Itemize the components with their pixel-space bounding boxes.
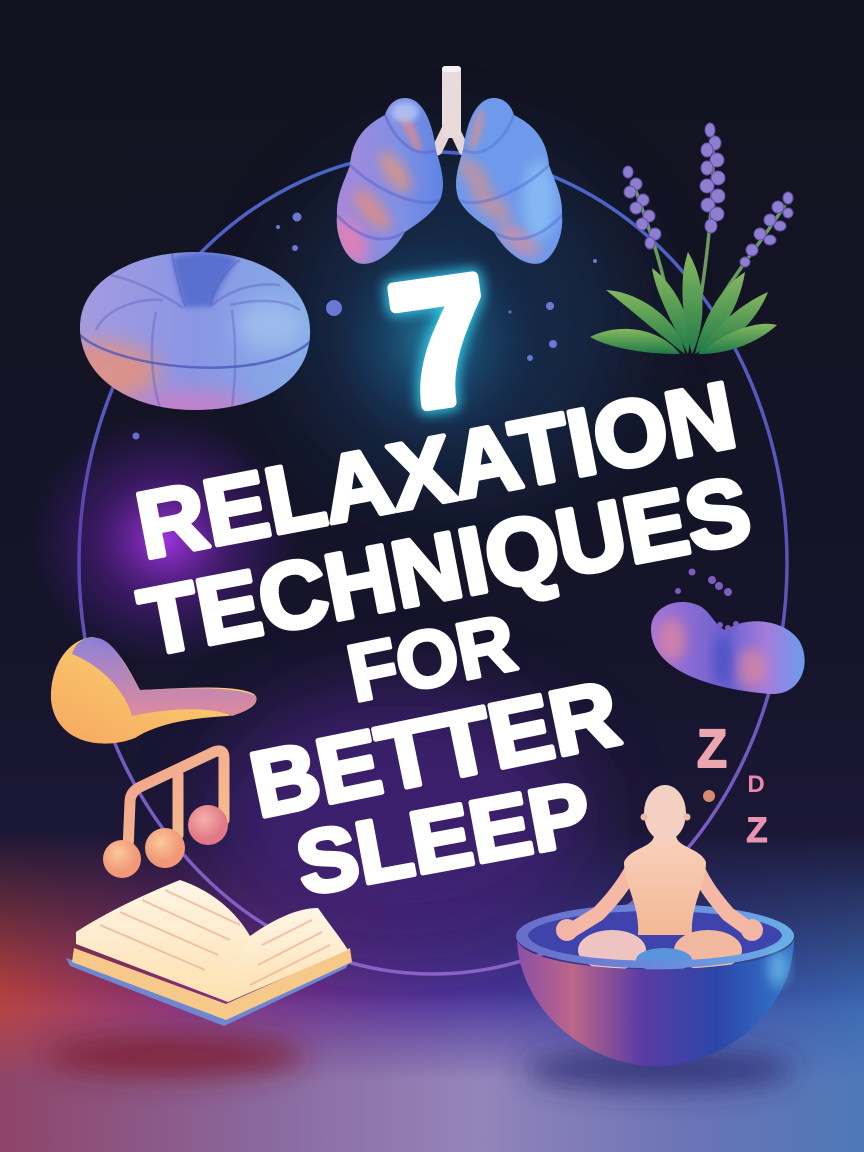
icon: lavender plant [590,123,793,354]
icon: kidney-shaped cushion [651,568,805,694]
icon: neti pot [51,637,256,744]
icon: lungs [326,66,562,268]
bowl front [516,936,794,1066]
number 7: 7 [380,239,503,447]
icon: z letters: Z [697,719,727,779]
icon: z letters: D [747,771,765,798]
bowl back [516,904,794,968]
icon: z letters: Z [746,811,768,850]
heading line: FOR: FOR [340,598,523,718]
heading line: TECHNIQUES: TECHNIQUES [132,457,758,676]
floor shadows [45,1034,795,1090]
title glows [30,230,540,665]
icon: open book [66,880,352,1026]
icon: round pillow [80,252,310,410]
icon: meditating figure in bowl [516,785,794,1066]
title [30,230,758,914]
heading line: BETTER: BETTER [242,662,627,837]
icon: z letters [697,719,768,850]
icon: music notes [103,751,228,878]
large ring [79,152,787,974]
figure [556,785,763,972]
number 7: 7 [380,239,503,447]
particles [132,212,597,440]
heading line: RELAXATION: RELAXATION [128,362,743,578]
heading line: SLEEP: SLEEP [289,762,598,914]
